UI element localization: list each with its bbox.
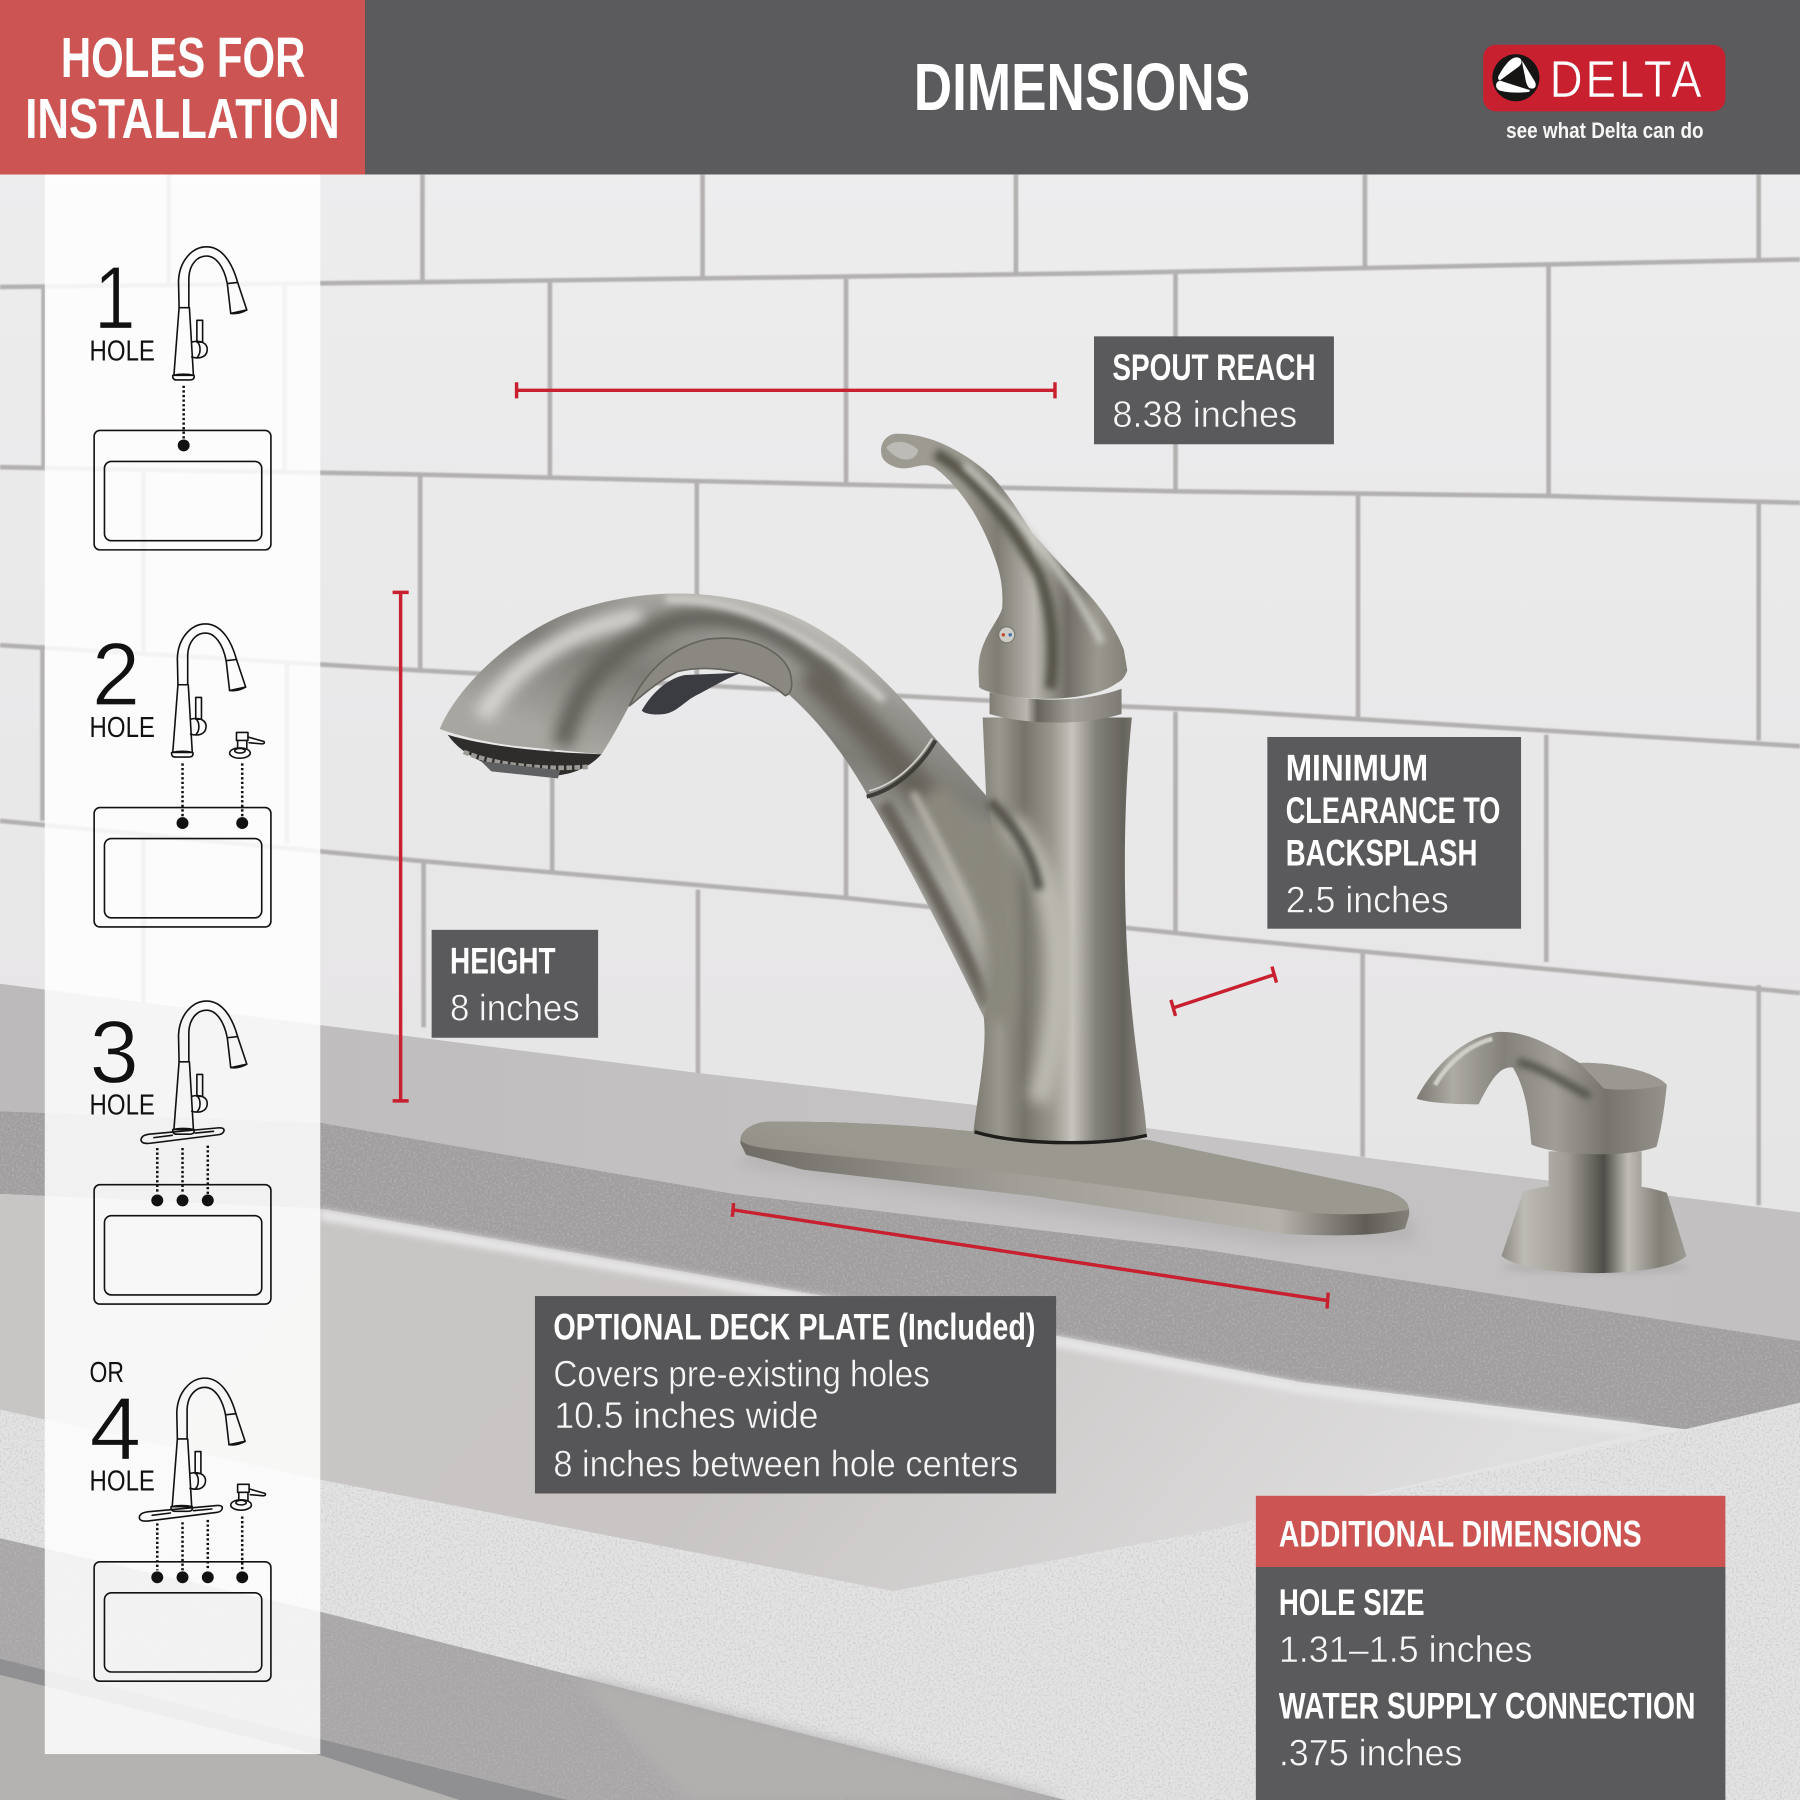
4 hole option [90,1357,271,1681]
aerator [448,735,602,778]
3 hole option: HOLE [90,1090,155,1122]
soap dispenser photo [1417,1032,1690,1274]
dimension line: spout reach [517,382,1055,398]
header bar [0,0,1800,174]
side panel: holes background [45,174,320,1754]
logo: Delta [1483,45,1725,143]
label: height: HEIGHT [450,940,556,981]
label: optional deck plate [535,1296,1056,1493]
dimension line: deck plate [732,1203,1328,1309]
panel: additional dimensions: .375 inches [1279,1733,1462,1774]
4 hole option: OR [90,1357,124,1389]
title: dimensions: DIMENSIONS [914,51,1250,125]
4 hole option: 4 [90,1379,141,1479]
label: optional deck plate: 10.5 inches wide [554,1395,818,1436]
spout seam ring [867,740,936,797]
label: spout reach: SPOUT REACH [1112,347,1316,388]
label: optional deck plate: 8 inches between hole centers [553,1443,1018,1484]
label: height: 8 inches [450,988,580,1029]
handle collar [990,689,1122,723]
spout shading [482,599,999,1004]
3 hole option [90,1001,271,1304]
label: minimum clearance: CLEARANCE TO [1286,790,1500,831]
lever handle [881,434,1127,699]
4 hole option: HOLE [90,1466,155,1498]
red heading block: holes for installation: HOLES FOR [61,26,305,89]
label: minimum clearance: MINIMUM [1286,748,1428,789]
panel: additional dimensions [1256,1496,1725,1800]
1 hole option [90,247,271,550]
2 hole option: HOLE [90,712,155,744]
faucet photo [440,434,1418,1246]
red heading block: holes for installation: INSTALLATION [25,87,340,150]
label: minimum clearance: BACKSPLASH [1286,833,1477,874]
spout [440,593,1010,1017]
label: height [432,930,598,1038]
dimension line: height [393,592,409,1101]
label: minimum clearance [1267,737,1521,929]
panel: additional dimensions: HOLE SIZE [1279,1582,1425,1623]
hot and cold indicator [999,627,1015,643]
panel: additional dimensions: ADDITIONAL DIMENSIONS [1279,1513,1642,1554]
logo: Delta: DELTA [1550,51,1705,109]
red heading block: holes for installation [0,0,365,174]
column body [964,717,1147,1145]
spout junction highlights [987,801,1059,1102]
spray head cap [629,638,792,706]
3 hole option: 3 [90,1002,139,1102]
panel: additional dimensions: 1.31–1.5 inches [1279,1629,1533,1670]
1 hole option: HOLE [90,335,155,367]
label: minimum clearance: 2.5 inches [1286,880,1449,921]
2 hole option [90,624,271,927]
dimension line: clearance to backsplash [1171,967,1277,1016]
label: spout reach: 8.38 inches [1112,394,1297,435]
logo: Delta: see what Delta can do [1506,118,1704,143]
2 hole option: 2 [92,624,140,724]
label: spout reach [1094,336,1334,444]
label: optional deck plate: OPTIONAL DECK PLATE (Included) [553,1307,1035,1348]
deck plate [735,1122,1418,1246]
1 hole option: 1 [94,247,135,347]
label: optional deck plate: Covers pre-existing holes [553,1354,930,1395]
dark underside of spray head [642,673,742,714]
